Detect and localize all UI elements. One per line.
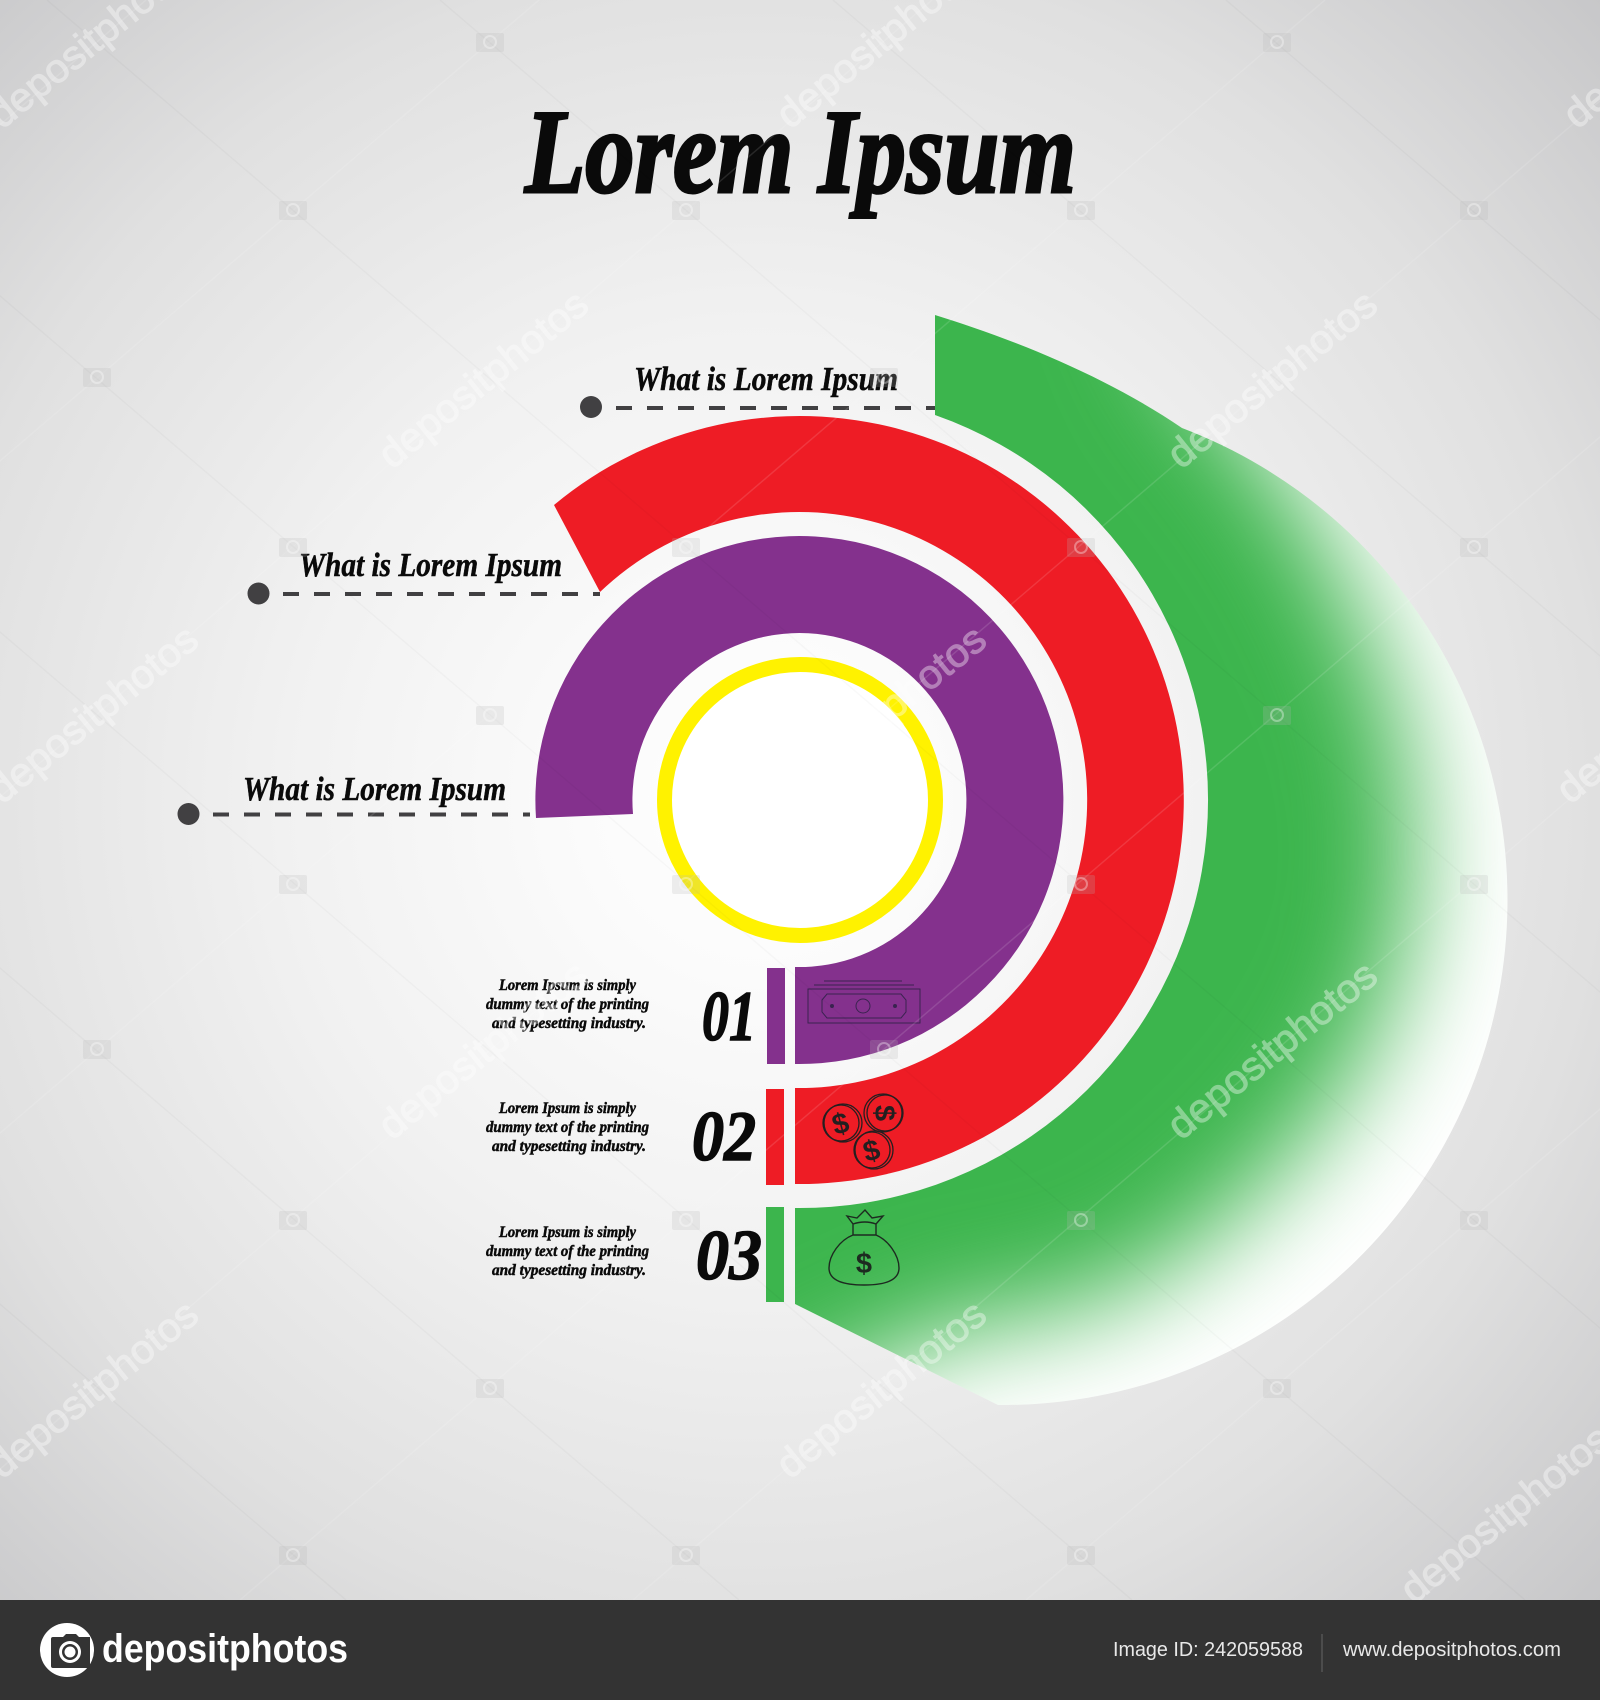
callout: What is Lorem Ipsum (top): What is Lorem Ipsum: [634, 361, 898, 398]
step 03 text block: [486, 1224, 649, 1279]
step 01 text block: dummy text of the printing: [486, 996, 649, 1013]
step 03 text block: and typesetting industry.: [492, 1262, 646, 1279]
footer brand name: depositphotos: [102, 1627, 348, 1671]
icon: footer camera logo: [40, 1623, 94, 1677]
step 02 text block: [486, 1100, 649, 1155]
icon: money bag: $: [856, 1248, 872, 1280]
step 01 number: 01: [702, 978, 756, 1056]
icon: coins: $: [868, 1105, 900, 1121]
panel: green outer ring segment: [795, 315, 1508, 1405]
callout: What is Lorem Ipsum (top): [580, 361, 935, 418]
title: Lorem Ipsum: [524, 85, 1076, 218]
step 02 colour bar: [766, 1089, 784, 1185]
step 02 text block: dummy text of the printing: [486, 1119, 649, 1136]
step 02 text block: Lorem Ipsum is simply: [498, 1100, 637, 1117]
step 02 number: 02: [692, 1098, 756, 1176]
icon: coins: [823, 1094, 903, 1169]
icon: coins: $: [860, 1134, 884, 1169]
callout: What is Lorem Ipsum (middle): [248, 547, 600, 604]
watermark text: depositphotos: [1159, 953, 1386, 1148]
panel: purple ring segment: [535, 536, 1063, 1064]
step 03 text block: Lorem Ipsum is simply: [498, 1224, 637, 1241]
watermark text: depositphotos: [768, 617, 995, 812]
watermark text: depositphotos: [768, 1292, 995, 1487]
step 02 text block: and typesetting industry.: [492, 1138, 646, 1155]
watermark text: depositphotos: [370, 953, 597, 1148]
callout: What is Lorem Ipsum (middle): What is Lorem Ipsum: [299, 547, 562, 584]
callout: What is Lorem Ipsum (lower): [178, 771, 530, 825]
yellow center ring: [664, 664, 936, 936]
icon: money bag: [829, 1210, 899, 1285]
step 01 text block: [486, 977, 649, 1032]
step 03 text block: dummy text of the printing: [486, 1243, 649, 1260]
step 01 text block: Lorem Ipsum is simply: [498, 977, 637, 994]
watermark text: depositphotos: [1159, 282, 1386, 477]
watermark text: depositphotos: [370, 282, 597, 477]
panel: red ring segment: [554, 416, 1184, 1184]
step 01 text block: and typesetting industry.: [492, 1015, 646, 1032]
step 03 colour bar: [766, 1207, 784, 1302]
step 03 number: 03: [696, 1217, 762, 1295]
icon: coins: $: [829, 1107, 853, 1142]
footer bar: [0, 1600, 1600, 1700]
footer website: www.depositphotos.com: [1342, 1639, 1561, 1661]
step 01 colour bar: [767, 968, 785, 1064]
footer image id: Image ID: 242059588: [1113, 1639, 1303, 1661]
callout: What is Lorem Ipsum (lower): What is Lorem Ipsum: [243, 771, 506, 808]
icon: banknote: [808, 981, 920, 1023]
